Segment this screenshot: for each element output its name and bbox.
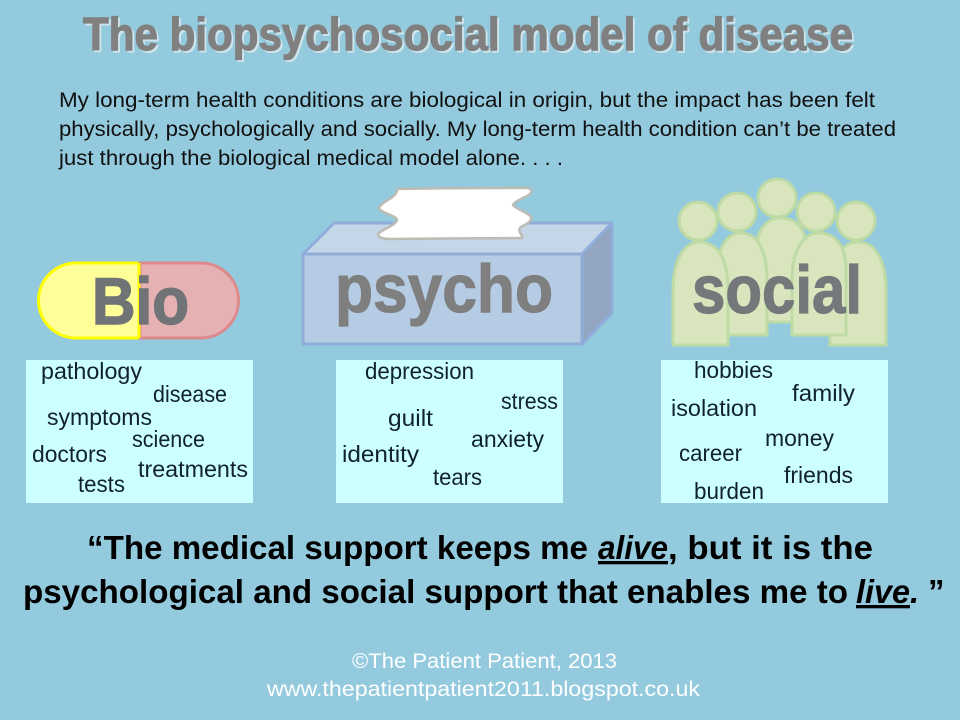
title: The biopsychosocial model of disease: [85, 10, 855, 62]
icon: pill with Bio label: Bio: [92, 264, 189, 338]
panel: psycho words: [336, 358, 563, 503]
panel: psycho words: identity: [342, 441, 420, 467]
icon: tissue box with psycho label: [303, 188, 612, 344]
panel: bio words: science: [132, 426, 205, 452]
panel: social words: isolation: [671, 395, 757, 421]
panel: bio words: [26, 358, 253, 503]
panel: psycho words: stress: [501, 388, 558, 414]
panel: psycho words: depression: [365, 358, 474, 384]
panel: social words: burden: [694, 478, 764, 504]
intro text block: physically, psychologically and socially. My long-term health condition can’t be treated: [59, 118, 896, 141]
title: The biopsychosocial model of disease: [83, 8, 853, 60]
quote: .: [910, 573, 919, 610]
quote: , but it is the: [668, 529, 873, 566]
quote: alive: [598, 529, 668, 566]
panel: bio words: symptoms: [47, 404, 152, 430]
panel: bio words: treatments: [138, 456, 248, 482]
icon: pill with Bio label: [38, 263, 238, 338]
panel: psycho words: tears: [433, 464, 482, 490]
panel: bio words: doctors: [32, 441, 107, 467]
footer credit: ©The Patient Patient, 2013: [352, 650, 617, 673]
icon: tissue box with psycho label: psycho: [335, 251, 553, 327]
panel: social words: family: [792, 380, 856, 406]
panel: social words: career: [679, 440, 742, 466]
quote: psychological and social support that enables me to: [23, 573, 848, 610]
intro text block: My long-term health conditions are biological in origin, but the impact has been felt: [59, 89, 875, 112]
panel: bio words: pathology: [41, 358, 143, 384]
panel: social words: [661, 357, 888, 504]
intro text block: [58, 89, 896, 170]
panel: social words: hobbies: [694, 357, 773, 383]
quote: [23, 529, 944, 610]
footer credit: [266, 650, 701, 701]
quote: ”: [928, 573, 944, 610]
quote: live: [856, 573, 910, 610]
icon: group of people with social label: [673, 179, 886, 345]
panel: bio words: disease: [153, 381, 227, 407]
footer credit: www.thepatientpatient2011.blogspot.co.uk: [266, 678, 701, 701]
panel: psycho words: anxiety: [471, 426, 545, 452]
quote: “The medical support keeps me: [87, 529, 588, 566]
intro text block: just through the biological medical model alone. . . .: [58, 147, 563, 170]
panel: social words: friends: [784, 462, 853, 488]
panel: bio words: tests: [78, 471, 125, 497]
panel: psycho words: guilt: [388, 405, 434, 431]
icon: group of people with social label: social: [692, 252, 862, 328]
panel: social words: money: [765, 425, 834, 451]
